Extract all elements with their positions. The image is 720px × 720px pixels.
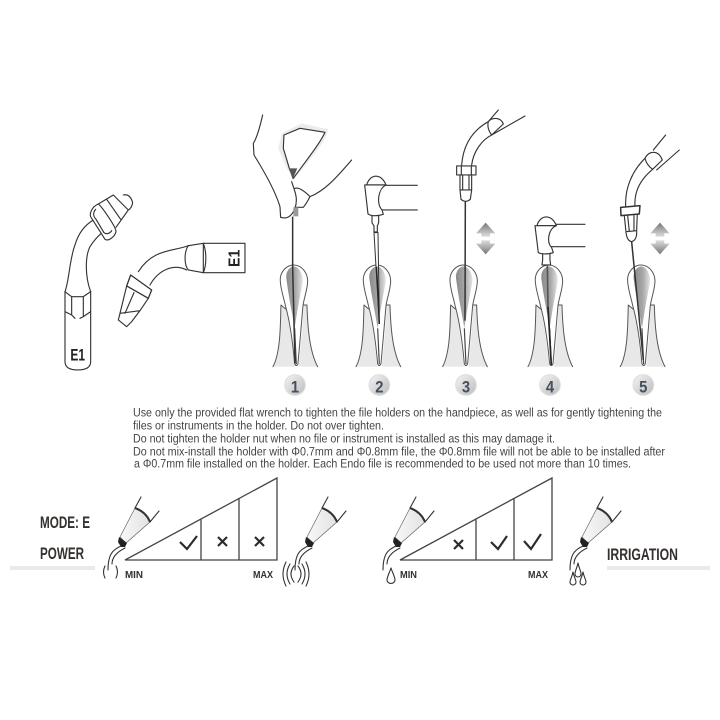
divider right: [607, 566, 710, 570]
badge 5: 5: [639, 379, 648, 397]
mark: not allowed medium power: [218, 537, 227, 546]
illustration: steps 2 to 5: [356, 110, 679, 397]
arrows: step 5 up and down: [650, 223, 670, 254]
icon: E1 holder upright: E1: [70, 346, 85, 365]
badge 2: [369, 375, 390, 397]
arrows: step 3 up and down: [476, 223, 495, 254]
text block: instructions: files or instruments in the holder. Do not over tighten.: [133, 418, 384, 432]
mark: allowed medium irrigation: [491, 536, 507, 549]
icon: tip with one drop: [383, 497, 434, 584]
chart: power scale: [125, 478, 277, 581]
step 1: tooth: [273, 265, 318, 367]
label: max: MAX: [528, 570, 548, 581]
text block: instructions: a Φ0.7mm file installed on the holder. Each Endo file is recommended to be used not more than 10 times.: [134, 456, 631, 470]
badge 3: [456, 375, 476, 397]
step 4: [528, 217, 585, 367]
icon: E1 holder sideways: [118, 243, 245, 327]
illustration: E1 tools and step 1: [65, 115, 352, 397]
heading: mode: MODE: E: [40, 514, 90, 532]
chart: irrigation scale: [400, 478, 552, 581]
mark: not allowed low irrigation: [454, 540, 463, 549]
label: min: MIN: [125, 570, 143, 581]
mark: allowed low power: [180, 536, 197, 549]
label: max: MAX: [253, 570, 273, 581]
step 5: [620, 135, 679, 367]
step 1: hand with wrench: [253, 115, 352, 363]
badge 4: [540, 375, 560, 397]
heading: power: POWER: [40, 545, 84, 563]
step 3: [443, 110, 525, 367]
step 2: [356, 176, 417, 367]
text block: instructions: Do not tighten the holder nut when no file or instrument is installed as this may damage it.: [133, 432, 555, 446]
badge 5: [633, 375, 654, 397]
icon: tip with high vibration: [283, 497, 346, 586]
icon: E1 holder upright: [65, 195, 133, 370]
icon: E1 holder sideways: E1: [226, 250, 243, 267]
badge 2: 2: [375, 379, 384, 397]
divider left: [10, 566, 95, 570]
badge 1: [285, 375, 305, 397]
badge 3: 3: [462, 379, 470, 397]
text block: instructions: [133, 406, 665, 470]
mark: allowed high irrigation: [524, 534, 541, 549]
icon: tip with three drops: [570, 497, 621, 585]
badge 4: 4: [546, 379, 554, 397]
heading: irrigation: IRRIGATION: [607, 546, 678, 564]
label: min: MIN: [400, 570, 417, 581]
mark: not allowed high power: [255, 537, 264, 546]
badge 1: 1: [291, 379, 299, 397]
icon: tip with low vibration: [104, 497, 159, 578]
